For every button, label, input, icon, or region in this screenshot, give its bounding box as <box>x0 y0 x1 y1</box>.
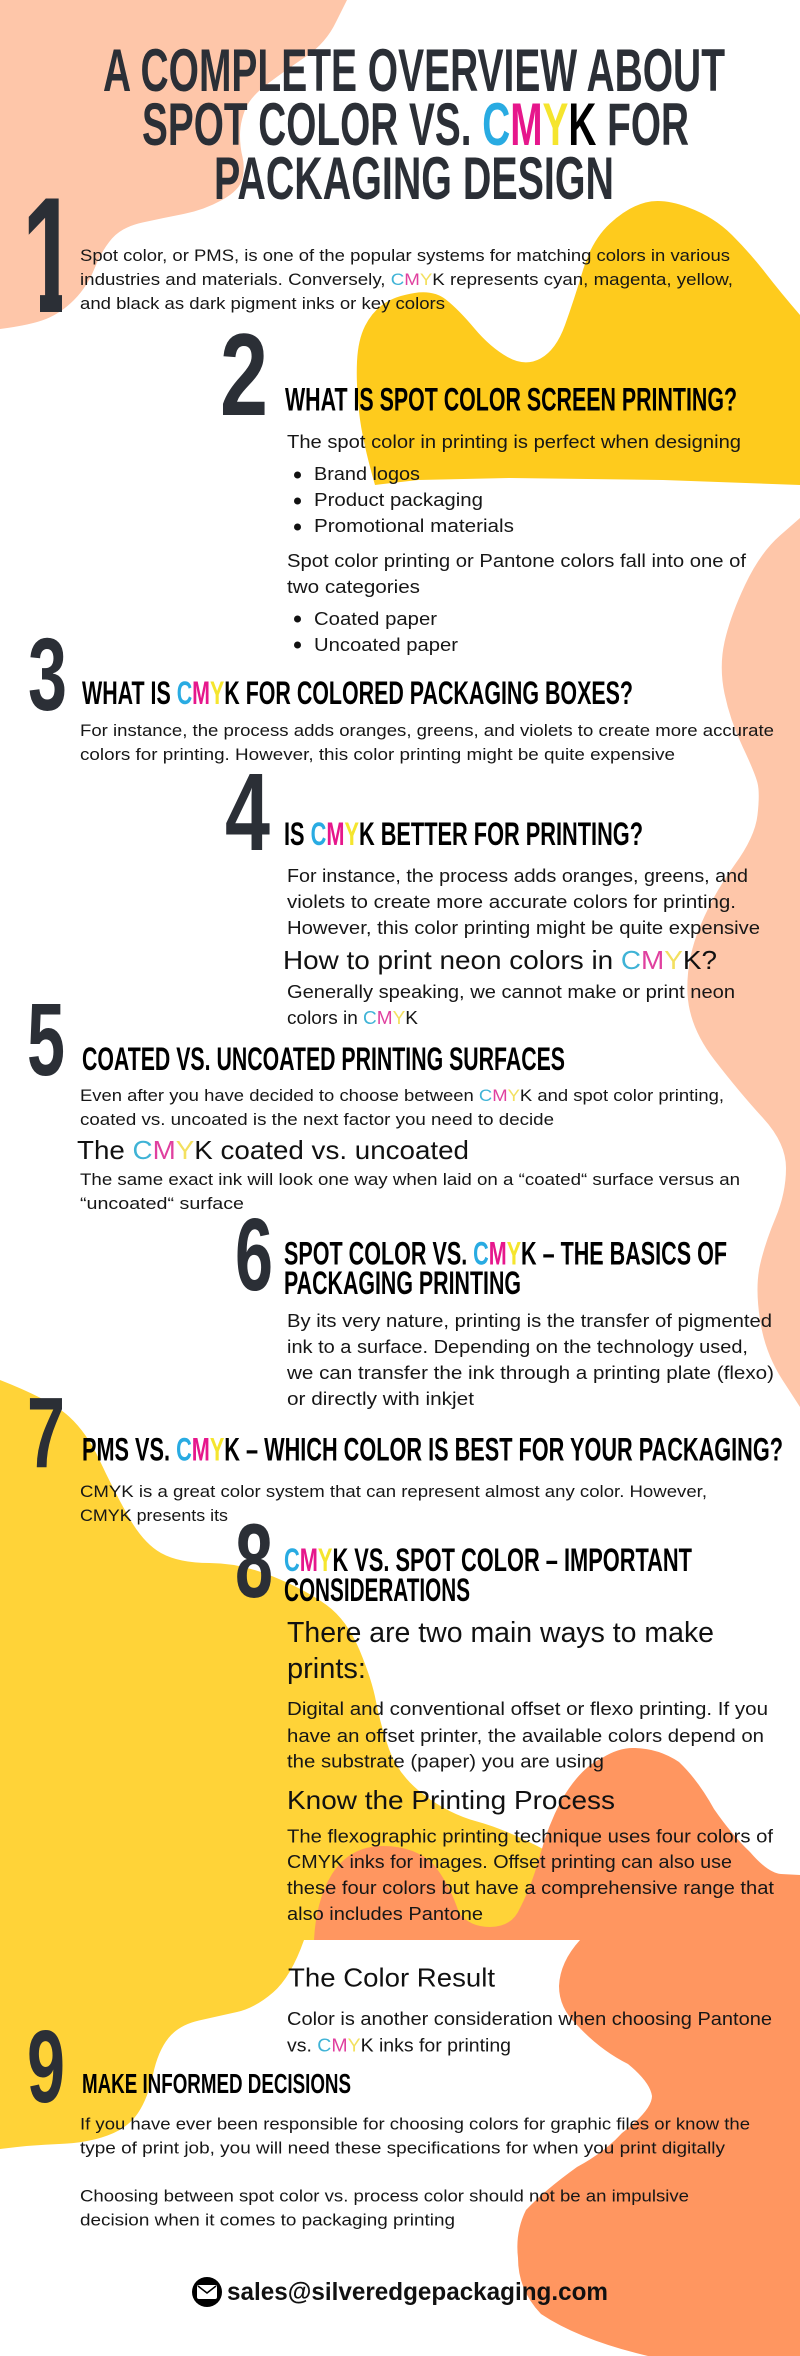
printing process text: also includes Pantone <box>287 1904 483 1924</box>
section 7 text: CMYK presents its <box>80 1506 228 1525</box>
section 3 text: For instance, the process adds oranges, greens, and violets to create more accurate <box>80 721 774 740</box>
number 4: 4 <box>225 751 270 874</box>
section 6 text: ink to a surface. Depending on the technology used, <box>287 1337 748 1357</box>
section 1 text: Spot color, or PMS, is one of the popular systems for matching colors in various <box>80 246 730 265</box>
bullet list: paper: Uncoated paper <box>314 635 458 655</box>
subheading: neon colors: How to print neon colors in CMYK? <box>283 945 717 975</box>
coated text: “uncoated“ surface <box>80 1194 244 1213</box>
section 1 text: and black as dark pigment inks or key colors <box>80 294 445 313</box>
title: SPOT COLOR VS. CMYK FOR <box>142 91 689 158</box>
section 3 <box>28 617 774 764</box>
two ways text <box>287 1699 768 1772</box>
section 9 text: decision when it comes to packaging printing <box>80 2210 455 2230</box>
section 4 <box>225 751 760 1028</box>
section 6 <box>235 1197 774 1409</box>
section 1 <box>22 163 733 347</box>
bullet list: paper <box>294 609 458 655</box>
bullet list: uses: Product packaging <box>314 490 483 510</box>
two ways text: the substrate (paper) you are using <box>287 1752 604 1772</box>
categories text <box>287 551 747 597</box>
section 9 text <box>80 2114 750 2230</box>
section 3 text <box>80 721 774 764</box>
section 5 text <box>80 1086 724 1129</box>
subheading: two main ways <box>287 1617 714 1685</box>
section 5 text: coated vs. uncoated is the next factor you need to decide <box>80 1110 554 1129</box>
two ways text: Digital and conventional offset or flexo printing. If you <box>287 1699 768 1719</box>
section 4 text: For instance, the process adds oranges, greens, and <box>287 866 748 886</box>
section 7 <box>27 1377 783 1525</box>
section 7 text: CMYK is a great color system that can represent almost any color. However, <box>80 1482 707 1501</box>
number 1: 1 <box>22 163 77 347</box>
section 2 <box>220 309 747 655</box>
printing process text <box>287 1826 774 1924</box>
section 6 text: we can transfer the ink through a printing plate (flexo) <box>286 1363 774 1383</box>
color result text: Color is another consideration when choosing Pantone <box>287 2009 772 2029</box>
subheading: two main ways: prints: <box>287 1653 366 1685</box>
contact email <box>192 2277 608 2307</box>
neon text <box>287 982 735 1028</box>
categories text: two categories <box>287 577 420 597</box>
number 7: 7 <box>27 1377 65 1489</box>
coated text <box>80 1170 740 1213</box>
number 6: 6 <box>235 1197 273 1312</box>
subheading: two main ways: There are two main ways to make <box>287 1617 714 1649</box>
blob: yellow lower left <box>0 1380 545 2149</box>
blob: orange lower right <box>314 1748 800 2356</box>
subheading: coated vs uncoated: The CMYK coated vs. uncoated <box>77 1135 469 1165</box>
heading 6: PACKAGING PRINTING <box>284 1265 521 1301</box>
printing process text: The flexographic printing technique uses four colors of <box>287 1826 774 1846</box>
section 9 text: Choosing between spot color vs. process color should not be an impulsive <box>80 2186 689 2206</box>
section 9 text: type of print job, you will need these specifications for when you print digitally <box>80 2138 726 2158</box>
neon text: colors in CMYK <box>287 1008 418 1028</box>
icon: envelope <box>192 2277 222 2307</box>
blob: yellow top right <box>357 201 800 485</box>
section 3 text: colors for printing. However, this color printing might be quite expensive <box>80 745 675 764</box>
color result text: vs. CMYK inks for printing <box>287 2036 511 2056</box>
number 3: 3 <box>28 617 67 732</box>
section 1 text: industries and materials. Conversely, CMYK represents cyan, magenta, yellow, <box>80 270 733 289</box>
section 9 text: If you have ever been responsible for choosing colors for graphic files or know the <box>80 2114 750 2134</box>
number 2: 2 <box>220 309 268 440</box>
bullet list: paper: Coated paper <box>314 609 437 629</box>
section 6 text: or directly with inkjet <box>287 1389 474 1409</box>
section 6 text: By its very nature, printing is the transfer of pigmented <box>287 1311 772 1331</box>
heading 9: MAKE INFORMED DECISIONS <box>82 2068 351 2099</box>
heading 8 <box>284 1542 692 1608</box>
section 9 <box>27 2009 750 2230</box>
heading 5: COATED VS. UNCOATED PRINTING SURFACES <box>82 1041 565 1077</box>
heading 6 <box>284 1236 727 1301</box>
blob: peach top left <box>0 0 347 329</box>
bullet list: uses: Brand logos <box>314 464 420 484</box>
subheading: know the printing process: Know the Printing Process <box>287 1785 615 1815</box>
number 9: 9 <box>27 2009 65 2124</box>
section 4 text <box>287 866 760 938</box>
email address: sales@silveredgepackaging.com <box>227 2278 608 2306</box>
section 4 text: However, this color printing might be quite expensive <box>287 918 760 938</box>
section 5 text: Even after you have decided to choose between CMYK and spot color printing, <box>80 1086 724 1105</box>
coated text: The same exact ink will look one way when laid on a “coated“ surface versus an <box>80 1170 740 1189</box>
two ways text: have an offset printer, the available colors depend on <box>287 1726 764 1746</box>
neon text: Generally speaking, we cannot make or print neon <box>287 982 735 1002</box>
categories text: Spot color printing or Pantone colors fall into one of <box>287 551 747 571</box>
section 7 text <box>80 1482 707 1525</box>
number 8: 8 <box>235 1503 273 1620</box>
color result text <box>287 2009 772 2056</box>
heading 8: CONSIDERATIONS <box>284 1572 470 1608</box>
section 8 <box>235 1503 774 2056</box>
subheading: the color result: The Color Result <box>288 1962 496 1992</box>
number 5: 5 <box>27 982 65 1097</box>
section 4 text: violets to create more accurate colors for printing. <box>287 892 736 912</box>
printing process text: these four colors but have a comprehensive range that <box>287 1878 774 1898</box>
intro text: The spot color in printing is perfect when designing <box>287 432 741 452</box>
section 5 <box>27 982 740 1213</box>
bullet list: uses <box>294 464 514 536</box>
blob: peach right <box>687 518 800 1407</box>
title <box>103 37 725 212</box>
heading 4: IS CMYK BETTER FOR PRINTING? <box>284 816 643 852</box>
section 6 text <box>286 1311 774 1409</box>
section 1 text <box>80 246 733 313</box>
bullet list: uses: Promotional materials <box>314 516 514 536</box>
printing process text: CMYK inks for images. Offset printing can also use <box>287 1852 732 1872</box>
